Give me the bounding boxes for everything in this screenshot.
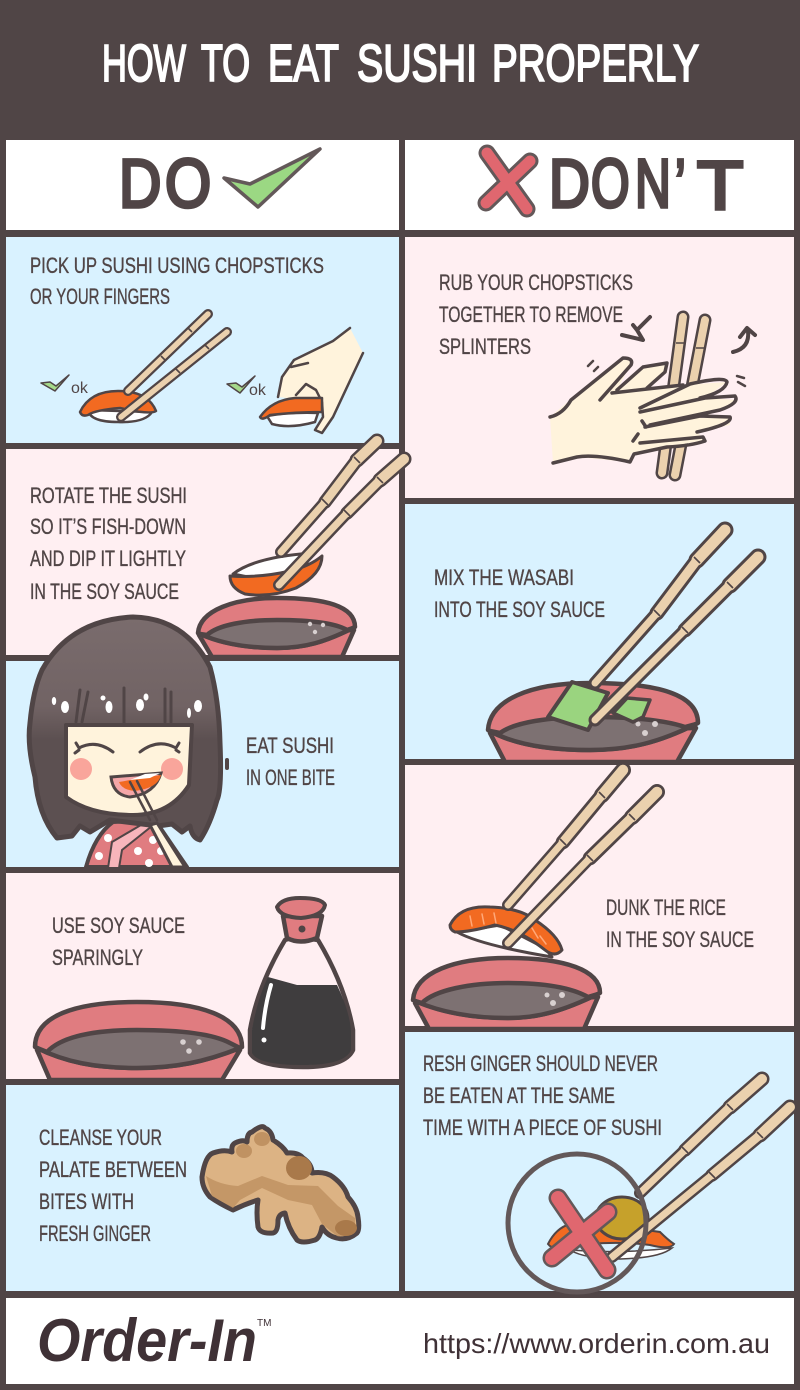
icon: sushi with chopsticks: [80, 314, 227, 422]
text: cleanse: FRESH GINGER: [39, 1221, 151, 1246]
face: [66, 725, 192, 815]
text: rotate: AND DIP IT LIGHTLY: [30, 546, 186, 571]
text: soy sparingly: SPARINGLY: [52, 945, 143, 970]
heading: don't: [549, 144, 743, 224]
trademark: TM: [257, 1318, 271, 1329]
mark: speech dash: [225, 758, 229, 770]
text: pick up: OR YOUR FINGERS: [30, 284, 170, 309]
text: cleanse: BITES WITH: [39, 1189, 134, 1214]
title: SUSHI: [357, 35, 477, 93]
panel: eat sushi: [6, 661, 399, 867]
panel: don't heading: [405, 140, 794, 230]
panel: footer: [6, 1298, 794, 1384]
panel: rub chopsticks: [405, 237, 794, 498]
heading: don't: T: [697, 147, 743, 224]
icon: hand holding sushi: [260, 328, 363, 433]
heading: don't: ’: [675, 144, 686, 222]
icon: hands rubbing chopsticks: [550, 317, 755, 475]
panel: cleanse palate: [6, 1085, 399, 1291]
icon: check ok 2: ok: [249, 382, 267, 399]
illustration: girl eating sushi: [29, 617, 221, 868]
heading: do: [119, 145, 211, 222]
heading: don't: N: [635, 145, 671, 222]
title: TO: [201, 35, 250, 93]
icon: bowl with wasabi and chopsticks: [488, 530, 758, 762]
text: mix wasabi: MIX THE WASABI: [434, 565, 574, 590]
hair: [29, 617, 221, 840]
panel: dunk the rice: [405, 765, 794, 1029]
icon: check ok 1: [41, 375, 89, 397]
icon: check ok 1: ok: [71, 380, 89, 397]
mouth with sushi: [111, 773, 161, 797]
panel: do heading: [6, 140, 399, 230]
text: eat sushi: IN ONE BITE: [246, 765, 335, 790]
illustration: chopsticks and sushi over soy bowl: [198, 441, 404, 657]
panel: mix the wasabi: [405, 504, 794, 762]
panel: fresh ginger warning: [405, 1032, 794, 1292]
logo: Order-In: Order-In: [37, 1307, 257, 1374]
text: ginger warning: BE EATEN AT THE SAME: [423, 1083, 615, 1108]
text: mix wasabi: INTO THE SOY SAUCE: [434, 597, 605, 622]
icon: arrows: [622, 317, 650, 340]
panel: use soy sparingly: [6, 873, 399, 1080]
text: ginger warning: TIME WITH A PIECE OF SUSHI: [423, 1115, 662, 1140]
heading: do: D: [119, 145, 161, 222]
text: rub chopsticks: TOGETHER TO REMOVE: [439, 302, 623, 327]
hair highlights: [61, 701, 69, 713]
text: rotate: ROTATE THE SUSHI: [30, 483, 187, 508]
heading: don't: D: [549, 146, 590, 222]
icon: check ok 2: [227, 376, 267, 399]
icon: bowl with sushi: [413, 770, 657, 1029]
icon: green check: [224, 149, 320, 207]
text: ginger warning: RESH GINGER SHOULD NEVER: [423, 1051, 658, 1076]
text: rotate: IN THE SOY SAUCE: [30, 579, 179, 604]
text: pick up: PICK UP SUSHI USING CHOPSTICKS: [30, 253, 324, 278]
kimono: [86, 820, 187, 867]
text: dunk: DUNK THE RICE: [606, 895, 726, 920]
heading: don't: O: [591, 145, 630, 222]
text: rub chopsticks: SPLINTERS: [439, 334, 531, 359]
heading: do: O: [165, 145, 211, 222]
icon: sushi with ginger, crossed out: [508, 1079, 790, 1292]
title: [102, 35, 699, 93]
text: soy sparingly: USE SOY SAUCE: [52, 913, 185, 938]
text: rotate: SO IT’S FISH-DOWN: [30, 514, 186, 539]
panel: pick up sushi: [6, 237, 399, 443]
title: PROPERLY: [492, 35, 699, 93]
title: HOW: [102, 35, 186, 93]
text: cleanse: PALATE BETWEEN: [39, 1157, 187, 1182]
panel: rotate the sushi: [6, 449, 399, 655]
icon: red cross: [486, 153, 530, 209]
icon: soy bowl: [35, 1002, 242, 1080]
title: EAT: [268, 35, 339, 93]
url: https://www.orderin.com.au: [423, 1328, 770, 1359]
icon: soy bottle: [250, 898, 353, 1067]
text: cleanse: CLEANSE YOUR: [39, 1125, 162, 1150]
text: rub chopsticks: RUB YOUR CHOPSTICKS: [439, 270, 633, 295]
icon: ginger root: [202, 1127, 359, 1242]
text: eat sushi: EAT SUSHI: [246, 733, 334, 758]
